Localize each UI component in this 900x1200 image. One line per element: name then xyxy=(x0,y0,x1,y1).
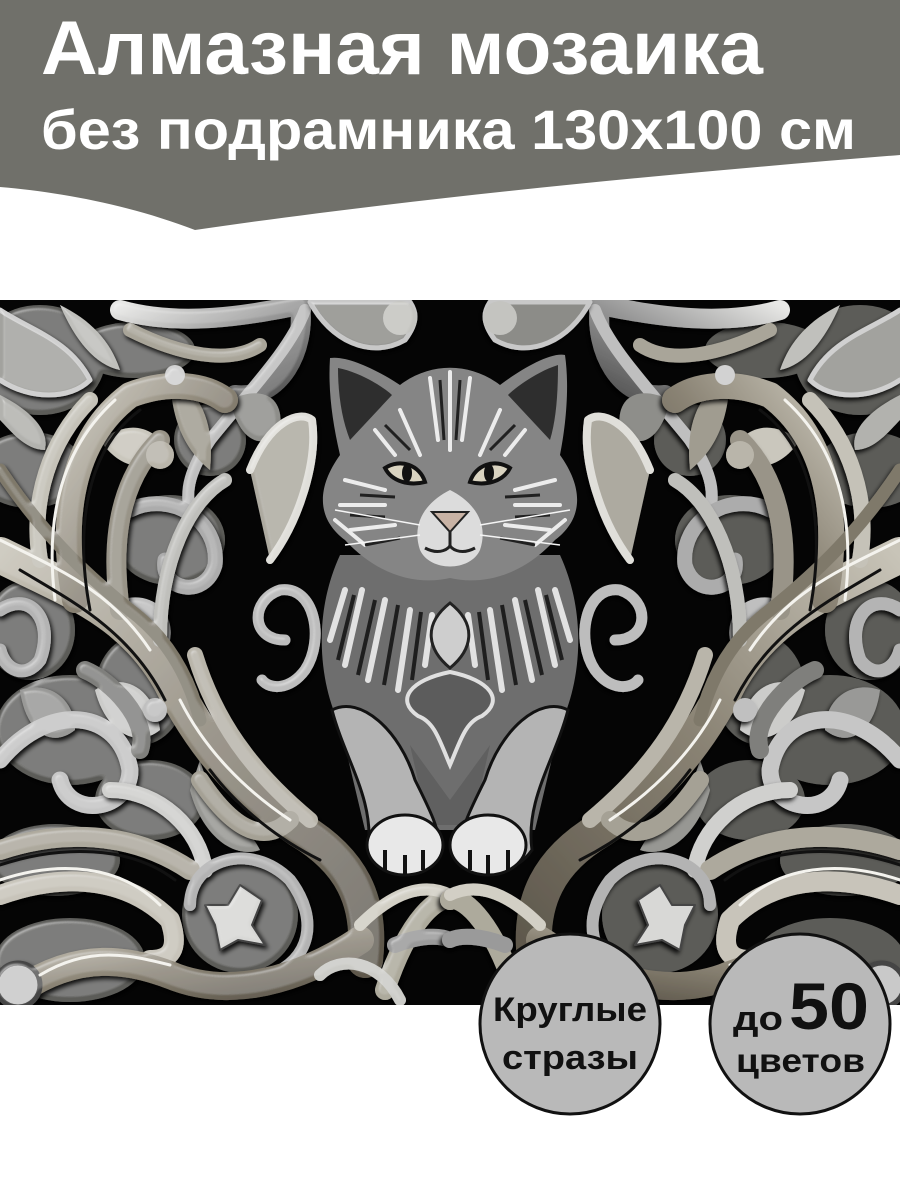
front legs xyxy=(330,705,438,834)
body fur xyxy=(322,555,578,830)
badge: round rhinestones: стразы xyxy=(502,1039,638,1077)
ears xyxy=(338,368,392,440)
badge: round rhinestones: Круглые xyxy=(493,991,647,1029)
head xyxy=(323,355,577,580)
title line 2: без подрамника 130х100 см xyxy=(41,98,856,161)
header banner xyxy=(0,0,900,230)
badge: up to 50 colours xyxy=(710,934,890,1114)
muzzle and nose xyxy=(417,490,483,566)
cat xyxy=(322,355,578,876)
ornament: left side xyxy=(0,301,450,1007)
artwork: silver cat with ornament xyxy=(0,300,900,1007)
badge: up to 50 colours: цветов xyxy=(736,1042,865,1079)
title line 1: Алмазная мозаика xyxy=(41,6,764,91)
belly xyxy=(410,745,490,825)
badge: round rhinestones xyxy=(480,934,660,1114)
eyes xyxy=(385,463,425,483)
badge: up to 50 colours: 50 xyxy=(789,969,869,1043)
head fur xyxy=(335,372,565,545)
chest medallion xyxy=(431,603,469,668)
ornament: right side xyxy=(450,301,900,1007)
paws xyxy=(367,815,443,875)
badge: up to 50 colours: до xyxy=(733,1000,783,1038)
whiskers xyxy=(335,510,570,545)
